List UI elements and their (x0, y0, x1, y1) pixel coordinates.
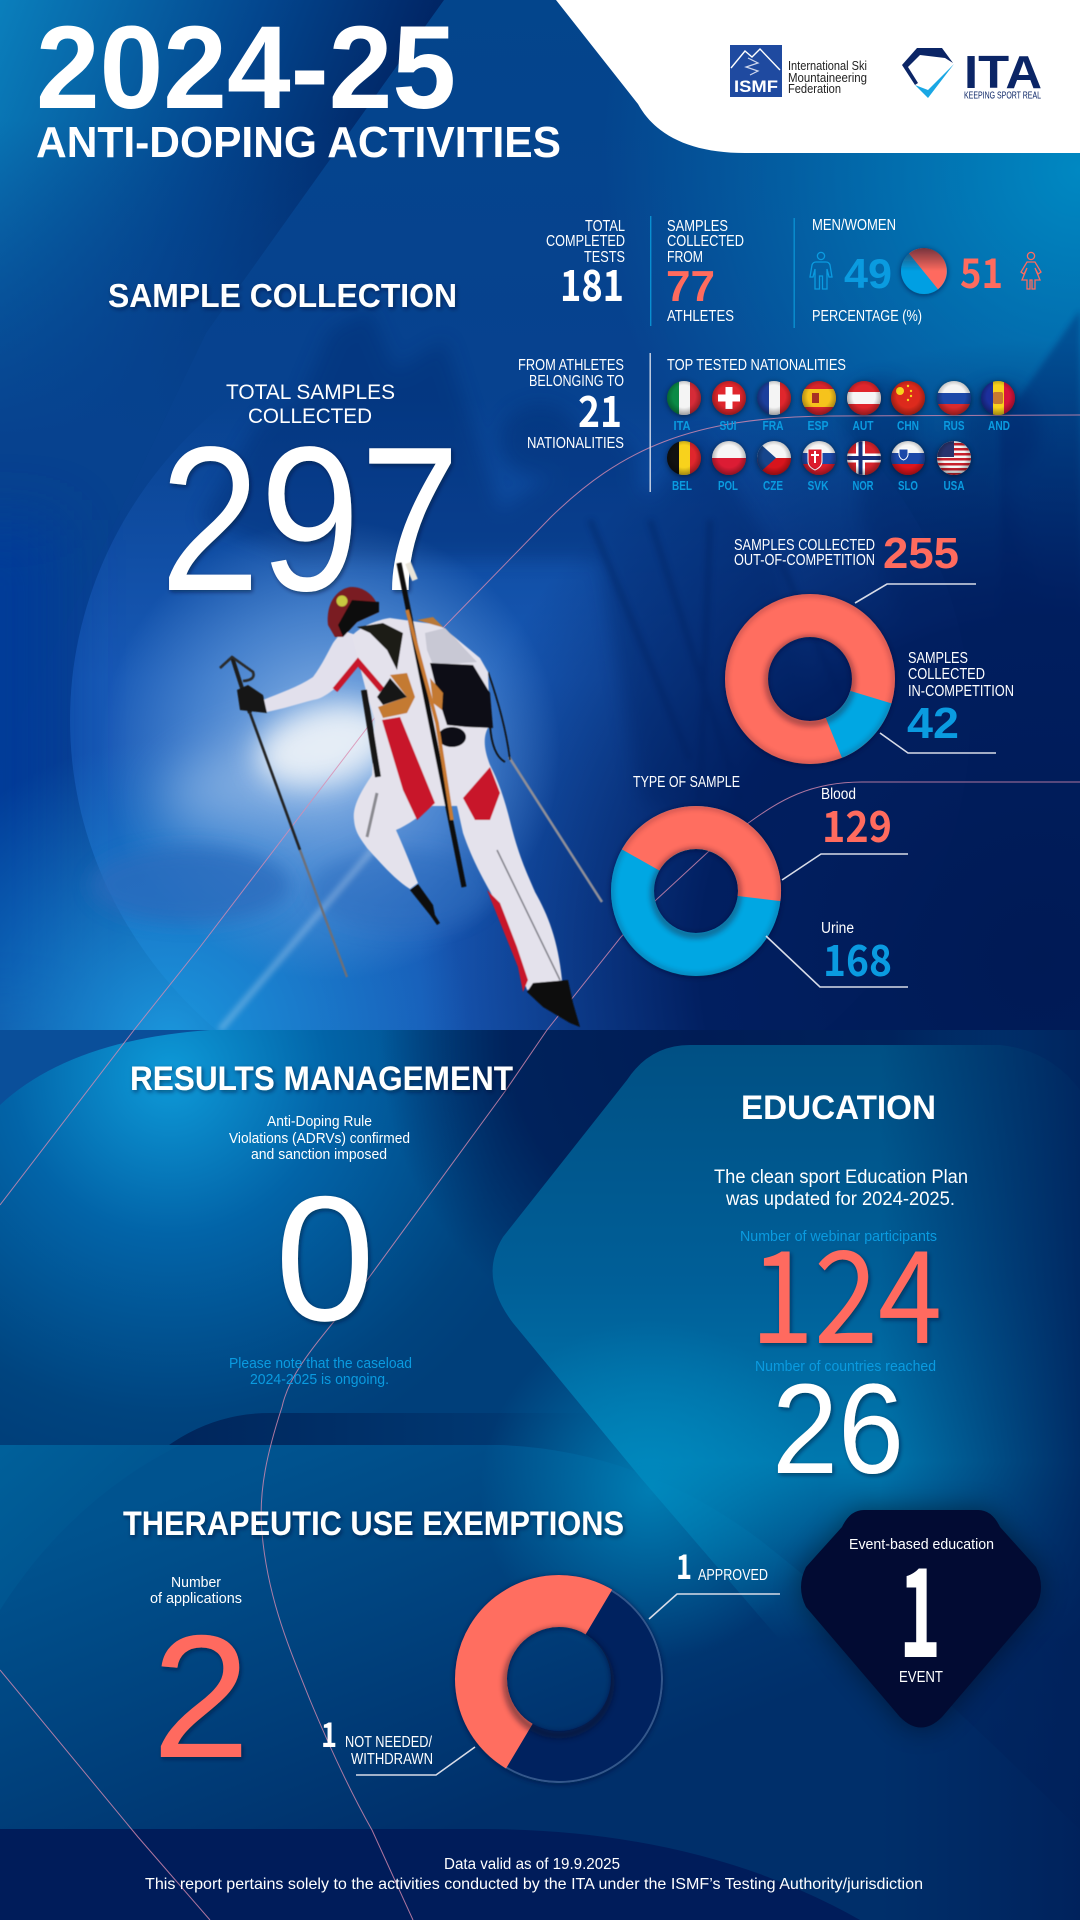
panel: education: The clean sport Education Plan (714, 1167, 968, 1188)
red stripes (382, 717, 435, 820)
panel: therapeutic use exemptions (123, 1505, 780, 1820)
donut: type of sample: 168 (823, 927, 892, 989)
flag labels: CZE (763, 478, 783, 493)
panel: therapeutic use exemptions: 2 (152, 1600, 250, 1795)
stat: men and women percentage: MEN/WOMEN (812, 217, 896, 234)
flag labels: SLO (898, 478, 918, 493)
left pole (232, 657, 250, 713)
flag: Norway (847, 441, 881, 476)
icon: woman (1021, 252, 1041, 289)
glove (237, 685, 267, 713)
stat: nationalities: BELONGING TO (529, 373, 624, 390)
backpack (417, 617, 463, 647)
stat: athletes: FROM (667, 249, 703, 266)
panel: education: was updated for 2024-2025. (725, 1189, 955, 1210)
stat: total samples collected: COLLECTED (248, 405, 372, 428)
white logo corner (556, 0, 1080, 153)
stat: total completed tests: COMPLETED (546, 233, 625, 250)
panel: results management: Anti-Doping Rule (267, 1113, 372, 1130)
logo: ISMF (730, 45, 867, 97)
panel: therapeutic use exemptions: of applications (150, 1590, 242, 1607)
donut: out-of-competition vs in-competition: IN-COMPETITION (908, 683, 1014, 700)
flag labels: USA (944, 478, 965, 493)
logo: ISMF: Mountaineering (788, 70, 867, 85)
panel: therapeutic use exemptions: NOT NEEDED/ (345, 1734, 433, 1751)
callout: event-based education: Event-based education (849, 1536, 994, 1553)
stat: athletes: ATHLETES (667, 308, 734, 325)
panel: results management (130, 1060, 513, 1388)
panel: therapeutic use exemptions: 1 (676, 1540, 692, 1589)
helmet (328, 587, 379, 637)
logo: ISMF: Federation (788, 81, 841, 96)
flag: Italy (667, 381, 701, 416)
footer: Data valid as of 19.9.2025 (444, 1856, 620, 1873)
panel: therapeutic use exemptions: Number (171, 1574, 221, 1591)
stat: men and women percentage: PERCENTAGE (%) (812, 308, 922, 325)
callout: event-based education (801, 1510, 1041, 1728)
panel: education: 124 (750, 1195, 942, 1380)
flag: Andorra (981, 381, 1015, 416)
flag: Belgium (667, 441, 701, 476)
stat: total completed tests: 181 (560, 252, 624, 314)
flag labels: NOR (852, 478, 874, 493)
donut: out-of-competition vs in-competition (725, 529, 1014, 764)
stat: athletes (666, 218, 744, 325)
panel: results management: RESULTS MANAGEMENT (130, 1060, 513, 1098)
flag labels: SVK (808, 478, 829, 493)
stat: men and women percentage: 51 (960, 240, 1003, 300)
flag: Slovakia (802, 441, 836, 476)
stat: men and women percentage (810, 217, 1041, 325)
donut: type of sample: 129 (822, 793, 892, 855)
footer: This report pertains solely to the activities conducted by the ITA under the ISMF’s Testing Authority/jurisdiction (145, 1876, 923, 1893)
donut: TUE outcomes (452, 1574, 665, 1786)
stat: nationalities (518, 357, 624, 452)
stat: nationalities: NATIONALITIES (527, 435, 624, 452)
stat: athletes: SAMPLES (667, 218, 728, 235)
donut: out-of-competition vs in-competition: 255 (883, 529, 959, 578)
callout: event-based education: 1 (899, 1515, 941, 1693)
stat: nationalities: 21 (578, 378, 622, 440)
flag labels: ESP (808, 418, 829, 433)
title (36, 2, 561, 167)
flag: USA (937, 441, 971, 476)
stat: total samples collected: TOTAL SAMPLES (226, 381, 395, 404)
flag labels: ITA (674, 418, 691, 433)
donut: type of sample: Urine (821, 920, 854, 937)
arm (263, 632, 362, 712)
flag labels: AND (988, 418, 1010, 433)
donut: out-of-competition vs in-competition: SAMPLES (908, 650, 968, 667)
pie: men women (901, 248, 947, 294)
flag: France (757, 381, 791, 416)
donut: out-of-competition vs in-competition: 42 (907, 699, 959, 748)
donut: type of sample (609, 774, 908, 989)
panel: results management: 2024-2025 is ongoing. (250, 1371, 389, 1388)
flag labels: SUI (720, 418, 736, 433)
stat: men and women percentage: 49 (844, 250, 892, 297)
title: ANTI-DOPING ACTIVITIES (36, 118, 561, 167)
suit (352, 618, 562, 990)
donut: out-of-competition vs in-competition: COLLECTED (908, 666, 985, 683)
panel: education: Number of countries reached (755, 1358, 936, 1375)
decorative pink lines (0, 415, 1080, 1920)
flag labels: FRA (762, 418, 784, 433)
stat: nationalities: FROM ATHLETES (518, 357, 624, 374)
flag: Switzerland (712, 381, 746, 416)
callout: event-based education: EVENT (899, 1669, 943, 1686)
flag: Czechia (757, 441, 791, 476)
logo: ITA (902, 46, 1042, 102)
flag: Russia (937, 381, 971, 416)
stat: total completed tests: TESTS (584, 249, 625, 266)
panel: education: Number of webinar participants (740, 1228, 937, 1245)
flag: Slovenia (891, 441, 925, 476)
donut: out-of-competition vs in-competition: SAMPLES COLLECTED (734, 537, 875, 554)
logo: ITA: ITA (964, 46, 1042, 98)
stat: athletes: 77 (666, 262, 715, 311)
flag labels: POL (718, 478, 738, 493)
stat: total samples collected: 297 (160, 404, 460, 634)
panel: results management: and sanction imposed (251, 1146, 387, 1163)
skis (399, 563, 464, 887)
panel: results management: Violations (ADRVs) confirmed (229, 1130, 410, 1147)
panel: therapeutic use exemptions: THERAPEUTIC USE EXEMPTIONS (123, 1505, 624, 1543)
flag labels: AUT (852, 418, 874, 433)
logo: ISMF: International Ski (788, 58, 867, 73)
flag labels: RUS (944, 418, 965, 433)
panel: therapeutic use exemptions: APPROVED (698, 1567, 768, 1584)
stat: total completed tests: TOTAL (585, 218, 625, 235)
harness (364, 690, 378, 777)
logo: ISMF: ISMF (734, 77, 778, 96)
footer (145, 1856, 923, 1893)
boots (527, 980, 580, 1027)
heading: sample collection: SAMPLE COLLECTION (108, 277, 457, 314)
donut: type of sample: Blood (821, 786, 856, 803)
icon: man (810, 252, 832, 289)
panel: top tested nationalities: TOP TESTED NATIONALITIES (667, 357, 846, 374)
panel: therapeutic use exemptions: 1 (321, 1708, 337, 1757)
panel: therapeutic use exemptions: WITHDRAWN (351, 1751, 433, 1768)
flag: Poland (712, 441, 746, 476)
panel: education (714, 1089, 968, 1501)
flag: China (891, 381, 925, 416)
flag: Spain (802, 381, 836, 416)
right pole (509, 757, 602, 902)
flag labels (672, 418, 1010, 493)
panel: top tested nationalities (667, 357, 1015, 493)
logo: ITA: KEEPING SPORT REAL (964, 90, 1041, 102)
stat: athletes: COLLECTED (667, 233, 744, 250)
donut: type of sample: TYPE OF SAMPLE (633, 774, 740, 791)
title: 2024-25 (36, 2, 456, 134)
illustration: ski mountaineer (220, 563, 602, 1027)
panel: results management: Please note that the caseload (229, 1355, 412, 1372)
flag: Austria (847, 381, 881, 416)
panel: results management: 0 (275, 1159, 375, 1358)
donut: out-of-competition vs in-competition: OUT-OF-COMPETITION (734, 552, 875, 569)
flag labels: BEL (672, 478, 692, 493)
panel: education: EDUCATION (741, 1089, 936, 1127)
stat: total completed tests (546, 218, 625, 314)
panel: education: 26 (772, 1358, 904, 1501)
flag labels: CHN (897, 418, 919, 433)
